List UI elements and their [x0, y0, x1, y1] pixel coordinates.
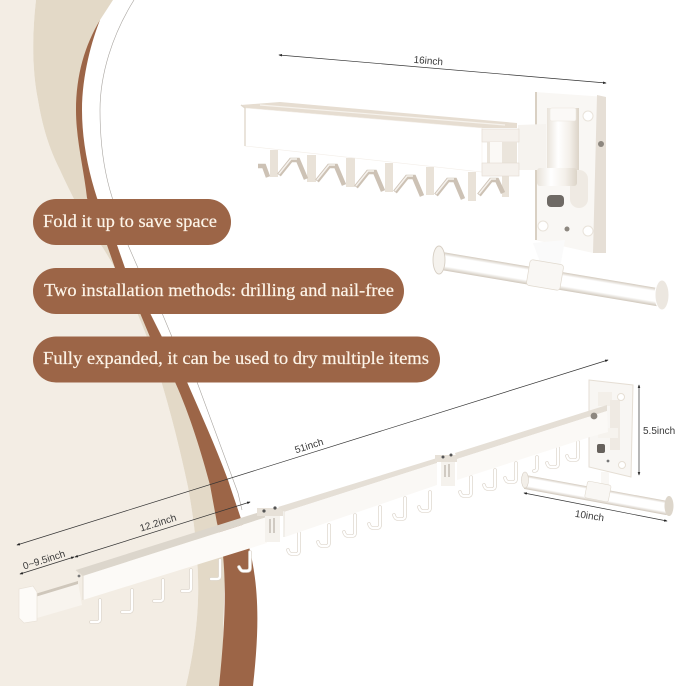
dimension: 0~9.5inch: 0~9.5inch — [22, 549, 67, 572]
dimension: 16inch — [279, 55, 606, 83]
dimension: 51inch: 51inch — [294, 437, 325, 456]
dimension: 5.5inch — [639, 385, 675, 475]
wall plate and hinge — [589, 380, 633, 477]
towel bar — [522, 472, 674, 516]
wall plate — [535, 92, 606, 253]
dimension: 12.2inch — [75, 502, 250, 557]
pill: installation methods — [33, 268, 404, 314]
top product: folded rack — [241, 92, 669, 310]
background: thin grey line — [100, 0, 242, 510]
bottom product: expanded rack — [19, 380, 674, 623]
dimension: 10inch — [524, 493, 667, 524]
sliding end rod — [19, 581, 82, 623]
pill: fully expanded — [33, 336, 440, 382]
joint one — [257, 506, 283, 542]
pill: fold it up: Fold it up to save space — [43, 211, 217, 231]
rack front face — [245, 108, 482, 172]
dimension: 51inch — [17, 360, 608, 545]
section two — [278, 458, 437, 537]
knuckle — [482, 129, 519, 176]
dimension: 12.2inch: 12.2inch — [139, 513, 178, 535]
pill: fold it up — [33, 199, 231, 245]
background: cream curve — [0, 0, 198, 686]
pill: installation methods: Two installation methods: drilling and nail-free — [44, 280, 394, 300]
dimension: 5.5inch: 5.5inch — [643, 426, 675, 437]
section three — [455, 405, 608, 480]
pill: fully expanded: Fully expanded, it can be used to dry multiple items — [43, 348, 429, 368]
hooks of expanded rack — [91, 442, 578, 622]
dimension: 10inch: 10inch — [574, 509, 605, 524]
towel bar — [433, 240, 669, 310]
background: beige curve — [33, 0, 225, 686]
rack top face — [241, 102, 517, 128]
hinge arm and barrel — [518, 108, 579, 186]
dimension: 16inch: 16inch — [413, 55, 443, 68]
section one — [76, 511, 267, 600]
hooks of folded rack — [258, 150, 509, 201]
joint two — [435, 454, 458, 486]
background: brown curve — [76, 20, 257, 686]
